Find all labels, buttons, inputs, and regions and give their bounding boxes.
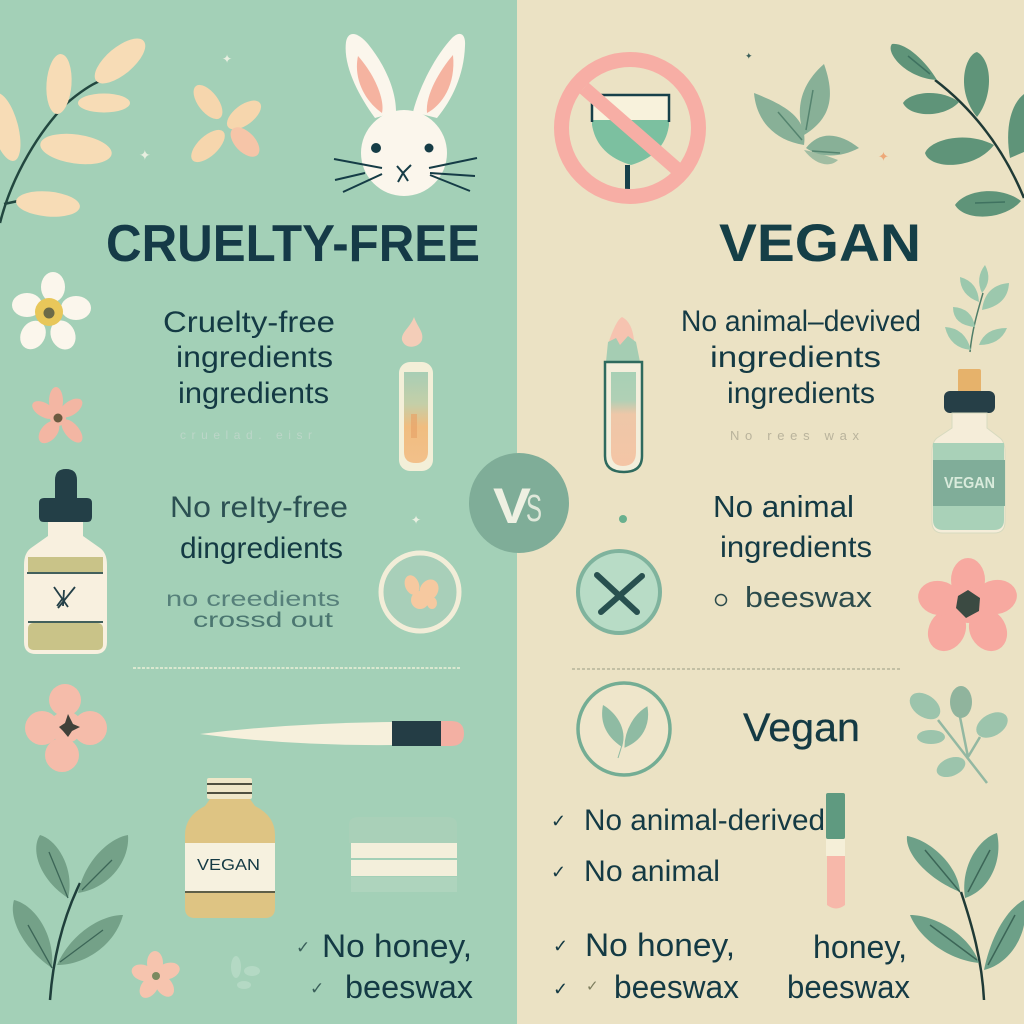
icon: vegan bottle left [185,778,275,918]
text block: no animal-derived [681,305,921,443]
text block: no cruelty-free ingredients [166,491,348,632]
list: right: No animal [584,855,720,888]
branch top left [0,31,152,223]
plant bottom left [13,835,128,1000]
list: right: beeswax [614,969,739,1005]
text block: no animal ingredients [713,489,873,614]
list: right: honey, [813,929,907,965]
list: right: ✓ [586,978,599,995]
sparkles left: ✦ [222,52,232,66]
butterfly flower top left [186,80,266,168]
title: cruelty-free: CRUELTY-FREE [106,215,480,273]
text block: cruelty-free ingredients [163,306,335,442]
text block: no cruelty-free ingredients: No reIty-free [170,491,348,524]
icon: test tube left [399,317,433,471]
text block: no animal ingredients: No animal [713,489,854,524]
icon: pink flower right [915,558,1020,658]
text block: no cruelty-free ingredients: crossd out [193,609,333,632]
text block: no animal ingredients: ingredients [720,531,872,564]
icon: leaf circle [578,683,670,775]
icon: brush [200,721,464,746]
icon: flower in circle [381,553,459,631]
text block: no animal-derived: ingredients [727,377,875,410]
list: right: No honey, [585,927,735,963]
leaves top center right [754,64,859,164]
vs badge: V [493,478,532,534]
plant right [945,265,1009,352]
branch top right [891,44,1024,217]
text block: no animal-derived: No animal–devived [681,305,921,338]
text block: no cruelty-free ingredients: dingredients [180,532,343,565]
list: right: ✓ [553,979,568,999]
icon: brush right [826,793,845,908]
icon: soap stack [349,817,457,892]
text block: no animal-derived: ingredients [710,341,881,374]
sparkles right: ✦ [745,51,753,61]
list bottom left [296,928,473,1005]
plant bottom right [907,833,1024,1000]
vs badge: S [526,488,542,530]
plant right middle [905,686,1012,783]
title: vegan: VEGAN [719,214,921,273]
text block: cruelty-free ingredients: cruelad. eisr [180,428,312,442]
list bottom left: ✓ [310,979,324,998]
list: right: beeswax [787,969,910,1005]
sparkles left: ✦ [139,147,151,163]
list: right [551,804,910,1005]
sparkles right [745,51,889,164]
sparkle middle left: ✦ [411,513,421,527]
icon: rabbit [334,34,477,196]
list bottom left: beeswax [345,969,473,1005]
text block: no cruelty-free ingredients: no creedients [166,588,340,611]
icon: dropper bottle left [24,469,107,654]
list bottom left: No honey, [322,928,472,964]
list: right: ✓ [553,936,568,956]
list bottom left: ✓ [296,938,310,957]
vs badge [469,453,569,553]
icon: pink flower small [29,387,86,447]
divider left [133,667,460,669]
icon: dropper bottle right: VEGAN [944,475,995,492]
sparkles left [139,52,232,163]
icon: no wine glass [562,60,698,196]
sparkles right: ✦ [878,149,889,164]
right panel background [517,0,1024,1024]
text block: cruelty-free ingredients: ingredients [176,341,333,374]
icon: flower white [12,272,91,354]
faded leaves [231,956,260,989]
heading: vegan: Vegan [743,706,860,750]
icon: pink flower left [25,684,107,772]
text block: cruelty-free ingredients: ingredients [178,377,329,410]
list: right: No animal-derived [584,804,825,837]
left panel background [0,0,517,1024]
text block: cruelty-free ingredients: Cruelty-free [163,306,335,339]
small green dot [619,515,627,523]
icon: pink flower bottom [129,951,182,1002]
icon: vegan bottle left: VEGAN [197,857,260,874]
text block: no animal-derived: No rees wax [730,428,860,443]
list: right: ✓ [551,811,566,831]
icon: dropper bottle right [932,369,1005,533]
text block: no animal ingredients: beeswax [745,582,873,614]
divider right [572,668,900,670]
icon: test tube right [605,317,642,472]
icon: x circle [578,551,660,633]
list: right: ✓ [551,862,566,882]
